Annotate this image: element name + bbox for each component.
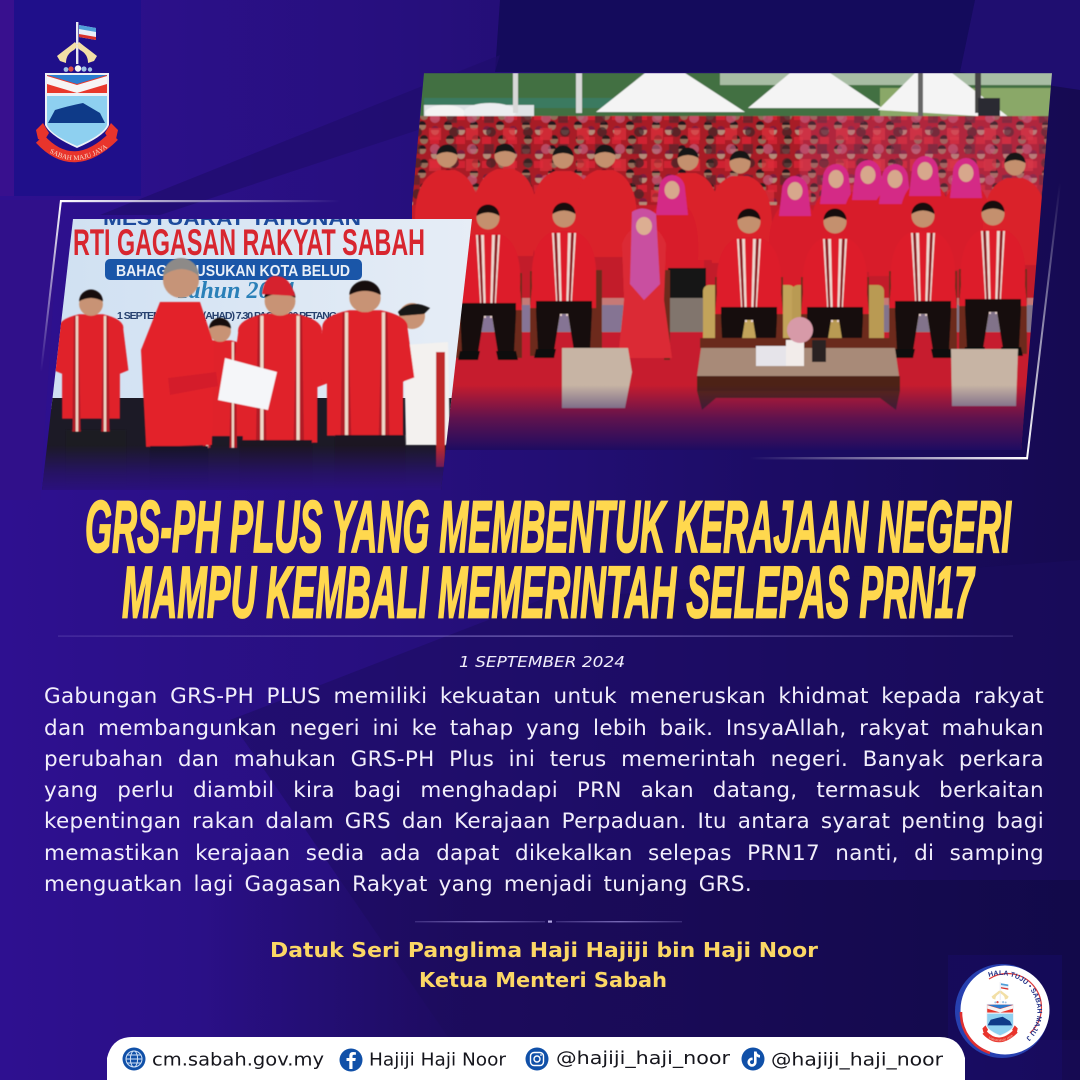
photo: group photo on red carpet [400,73,1060,452]
divider line under title [58,636,1013,637]
icon: tiktok [742,1048,764,1070]
photo: seated row [454,200,1027,364]
tiktok handle: @hajiji_haji_noor [771,1050,944,1070]
photo: LED screen backdrop: RTI GAGASAN RAKYAT SABAH [73,222,425,263]
photo: standing row [415,144,1047,340]
logo: Hala Tuju badge: HALA TUJU • SABAH MAJU JAYA [988,970,1042,1042]
body text: memastikan kerajaan sedia ada dapat dikekalkan selepas PRN17 nanti, di samping [44,841,1044,866]
signature name: Datuk Seri Panglima Haji Hajiji bin Haji Noor [270,938,819,962]
body text: Gabungan GRS-PH PLUS memiliki kekuatan untuk meneruskan khidmat kepada rakyat [44,684,1044,709]
photo: white tents [596,73,1008,117]
photo: bottom fade [42,446,446,490]
photo: crowd [412,115,1048,206]
icon: instagram [526,1048,548,1070]
photo: LED screen backdrop: 1 SEPTEMBER 2024 (AHAD) 7.30 PAGI - 5.00 PETANG [117,310,337,322]
photo: handing over document [40,209,475,493]
logo: Sabah crest top left [36,22,118,162]
photo background: trees and sky [420,73,1052,117]
photo: red carpet [446,331,1031,450]
frame: left photo [40,200,340,372]
body text: yang perlu diambil kira bagi menghadapi PRN akan datang, termasuk berkaitan [44,778,1044,803]
photo: men in red [54,258,450,491]
photo: LED screen backdrop [40,209,475,409]
body text: kepentingan rakan dalam GRS dan Kerajaan Perpaduan. Itu antara syarat penting bagi [44,809,1044,834]
instagram handle: @hajiji_haji_noor [556,1048,731,1069]
icon: facebook [340,1048,362,1072]
photo: LED screen backdrop: Tahun 2024 [176,278,294,304]
photo: LED screen backdrop: BAHAGIAN USUKAN KOTA BELUD [116,263,350,280]
icon: globe [122,1048,146,1070]
divider above signature [415,920,682,923]
photo: tables with flowers [562,317,1018,410]
photo: LED screen backdrop: MESYUARAT TAHUNAN [103,209,361,230]
facebook name: Hajiji Haji Noor [369,1050,507,1070]
title [85,487,1012,634]
frame: right photo [750,183,1061,459]
body text: perubahan dan mahukan GRS-PH Plus ini terus memerintah negeri. Banyak perkara [44,747,1044,772]
signature name: Ketua Menteri Sabah [419,968,667,992]
date: 1 SEPTEMBER 2024 [459,653,625,671]
photo: stage dark lower area [40,398,475,493]
footer bar [107,1037,965,1080]
signature name [270,938,819,992]
body text: menguatkan lagi Gagasan Rakyat yang menjadi tunjang GRS. [44,872,752,897]
website: cm.sabah.gov.my [152,1050,324,1070]
body text: dan membangunkan negeri ini ke tahap yang lebih baik. InsyaAllah, rakyat mahukan [44,716,1044,741]
photo: bottom fade [446,388,1026,450]
